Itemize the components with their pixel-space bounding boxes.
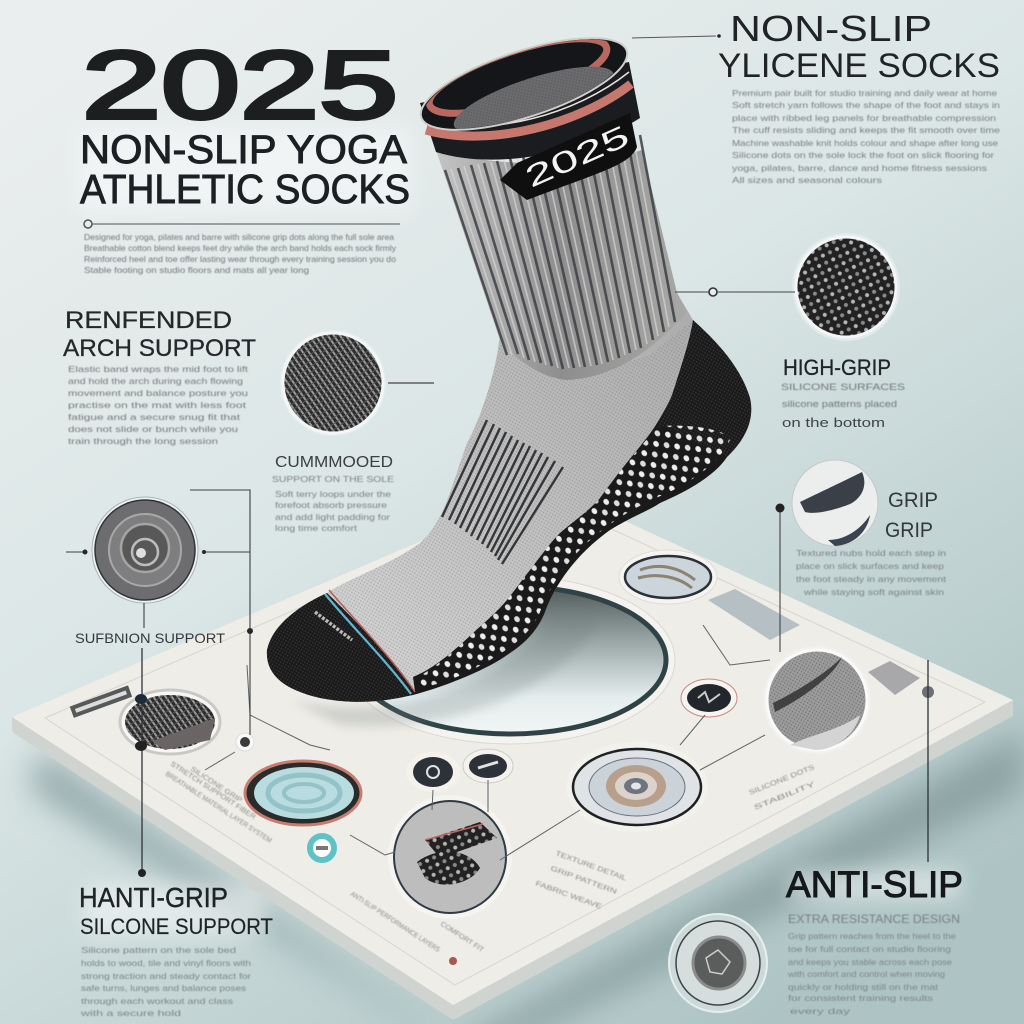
display board bbox=[12, 486, 1013, 1020]
sock toe seam stripes bbox=[325, 590, 415, 694]
connector: anti-grip line bbox=[135, 648, 147, 877]
arch body text: train through the long session bbox=[68, 436, 218, 446]
board fine print: ANTI-SLIP PERFORMANCE LAYERS bbox=[349, 891, 441, 954]
board fine print: STABILITY bbox=[753, 781, 817, 812]
board fine print: BREATHABLE MATERIAL LAYER SYSTEM bbox=[164, 771, 273, 845]
board fine print: SILICONE DOTS bbox=[748, 764, 816, 797]
board icon: eye bbox=[406, 752, 460, 792]
anti-slip body text: Grip pattern reaches from the heel to the bbox=[788, 931, 956, 941]
board fine print: STRETCH SUPPORT FIBER bbox=[169, 761, 257, 821]
anti-slip connector bbox=[927, 660, 929, 862]
anti-slip body text: with comfort and control when moving bbox=[787, 969, 945, 979]
callout: anti-grip silicone support bbox=[79, 882, 273, 1018]
top right body text: Soft stretch yarn follows the shape of the foot and stays in bbox=[732, 100, 1000, 110]
anti-grip body text: Silicone pattern on the sole bed bbox=[81, 945, 236, 955]
top right connector bbox=[632, 34, 721, 38]
anti-grip body text: strong traction and steady contact for bbox=[81, 971, 251, 981]
heading glows bbox=[80, 130, 960, 935]
intro body text: Reinforced heel and toe offer lasting wear through every training session you do bbox=[84, 254, 396, 264]
top right body text: The cuff resists sliding and keeps the fit smooth over time bbox=[732, 125, 1000, 135]
board marker dot bbox=[236, 733, 254, 751]
grip swatch circle bbox=[792, 460, 878, 546]
callout: anti-slip bbox=[786, 864, 963, 1016]
board fine print bbox=[164, 761, 817, 954]
anti-slip body text: toe for full contact on studio flooring bbox=[788, 944, 951, 954]
grip body text bbox=[796, 548, 947, 597]
callout: cushioned bbox=[272, 454, 394, 533]
anti-slip button swatch bbox=[669, 914, 767, 1012]
board icon: dark badge right bbox=[681, 679, 737, 717]
intro body text bbox=[84, 232, 397, 275]
cuff opening bbox=[420, 37, 628, 131]
grip heading 1: GRIP bbox=[888, 489, 938, 512]
board marker right bbox=[922, 686, 934, 698]
arch body text: fatigue and a secure snug fit that bbox=[68, 412, 241, 422]
title line 1: NON-SLIP YOGA bbox=[80, 128, 407, 172]
anti-slip body text: quickly or holding still on the mat bbox=[788, 982, 939, 992]
anti-slip subheading: EXTRA RESISTANCE DESIGN bbox=[788, 912, 960, 926]
board fine print: TEXTURE DETAIL bbox=[554, 850, 627, 883]
high-grip swatch circle bbox=[792, 233, 900, 341]
top right body text: Silicone dots on the sole lock the foot on slick flooring for bbox=[732, 150, 994, 160]
arch body text: practise on the mat with less foot bbox=[68, 400, 247, 410]
sock knit texture bbox=[327, 320, 693, 690]
board swatch: left woven bbox=[120, 690, 220, 754]
cuff front stripes bbox=[425, 72, 631, 136]
intro body text: Stable footing on studio floors and mats all year long bbox=[84, 265, 309, 275]
arch heading line 2: ARCH SUPPORT bbox=[63, 335, 256, 362]
anti-slip body text bbox=[787, 931, 956, 1016]
on the bottom label: on the bottom bbox=[782, 415, 885, 430]
arch swatch circle bbox=[280, 330, 386, 436]
anti-grip heading: HANTI-GRIP bbox=[79, 882, 228, 913]
board icon: teal ring bbox=[310, 836, 334, 860]
cushioned body text: SUPPORT ON THE SOLE bbox=[272, 474, 394, 484]
arch connector arrow bbox=[388, 382, 434, 384]
board swatch: knit fold bbox=[763, 646, 871, 754]
intro body text: Designed for yoga, pilates and barre with silicone grip dots along the full sole area bbox=[84, 232, 394, 242]
board annotation lines bbox=[205, 625, 770, 860]
callout: non-slip silicone socks bbox=[632, 8, 1000, 185]
sock body bbox=[267, 150, 751, 702]
grip body text: Textured nubs hold each step in bbox=[796, 548, 946, 558]
grip body text: while staying soft against skin bbox=[803, 587, 944, 597]
suspension support label: SUFBNION SUPPORT bbox=[75, 630, 225, 646]
board fine print: FABRIC WEAVE bbox=[534, 880, 603, 911]
board swatch: silicone pads bbox=[388, 795, 512, 919]
anti-slip body text: for consistent training results bbox=[788, 993, 933, 1003]
board swatch: concentric ripple bbox=[566, 742, 708, 832]
board swatch: lined top right bbox=[619, 550, 717, 604]
callout: reinforced arch support bbox=[63, 307, 256, 446]
top right body text bbox=[732, 88, 1000, 185]
sock ribbed leg bbox=[436, 135, 687, 380]
cushioned heading: CUMMMOOED bbox=[275, 454, 393, 471]
sock side stripes bbox=[442, 420, 563, 564]
anti-grip body text: through each workout and class bbox=[81, 996, 233, 1006]
board fine print: GRIP PATTERN bbox=[549, 865, 617, 896]
anti-slip body text: and keeps you stable across each pose bbox=[788, 957, 952, 967]
high-grip body text bbox=[781, 382, 905, 409]
callout: grip bbox=[796, 489, 947, 597]
sock shadow on recess bbox=[290, 610, 600, 726]
cushioned body text: Soft terry loops under the bbox=[275, 489, 391, 499]
board swatch: teal silicone bbox=[245, 761, 361, 825]
cushioned body text: and add light padding for bbox=[275, 512, 390, 522]
arch body text bbox=[68, 364, 249, 446]
board oval recess bbox=[354, 586, 666, 734]
arch body text: does not slide or bunch while you bbox=[68, 424, 238, 434]
anti-grip body text: safe turns, lunges and balance poses bbox=[81, 983, 246, 993]
top right body text: All sizes and seasonal colours bbox=[732, 175, 882, 185]
title year: 2025 bbox=[82, 32, 398, 139]
top right heading line 2: YLICENE SOCKS bbox=[718, 47, 1000, 85]
title bbox=[80, 32, 410, 212]
intro body text: Breathable cotton blend keeps feet dry while the arch band holds each sock firmly bbox=[84, 243, 397, 253]
board photo strip bbox=[708, 589, 800, 640]
board shadow bbox=[30, 730, 1024, 1024]
grip heading 2: GRIP bbox=[885, 519, 933, 542]
cushioned body text: forefoot absorb pressure bbox=[275, 500, 387, 510]
sock black knit texture bbox=[267, 320, 751, 702]
board surface bbox=[12, 486, 1013, 1005]
sock black heel, sole and toe bbox=[267, 320, 751, 702]
arch body text: Elastic band wraps the mid foot to lift bbox=[68, 364, 249, 374]
board inner border bbox=[45, 500, 985, 985]
anti-grip body text bbox=[80, 945, 251, 1018]
arch body text: movement and balance posture you bbox=[68, 388, 248, 398]
arch body text: and hold the arch during each flowing bbox=[68, 376, 243, 386]
intro rule bbox=[84, 220, 400, 228]
high-grip connector bbox=[675, 288, 795, 296]
cushioned body text bbox=[272, 474, 394, 533]
suspension swatch coin bbox=[92, 497, 198, 603]
anti-slip heading: ANTI-SLIP bbox=[786, 864, 963, 905]
top right body text: yoga, pilates, barre, dance and home fitness sessions bbox=[732, 163, 987, 173]
board thickness bbox=[12, 700, 1013, 1020]
board label strip left bbox=[70, 685, 132, 718]
sock bbox=[267, 19, 751, 702]
arch heading line 1: RENFENDED bbox=[65, 307, 232, 334]
top right body text: Premium pair built for studio training and daily wear at home bbox=[732, 88, 997, 98]
anti-grip body text: with a secure hold bbox=[80, 1008, 181, 1018]
top right body text: Machine washable knit holds colour and shape after long use bbox=[732, 138, 998, 148]
board recess ring bbox=[345, 576, 675, 744]
cuff outer band bbox=[420, 62, 640, 160]
silicone support heading: SILCONE SUPPORT bbox=[80, 914, 273, 939]
anti-grip body text: holds to wood, tile and vinyl floors with bbox=[81, 958, 251, 968]
board icon: badge bbox=[463, 749, 513, 783]
top right heading line 1: NON-SLIP bbox=[730, 8, 932, 49]
suspension connector lines bbox=[66, 490, 250, 735]
high-grip body text: silicone patterns placed bbox=[782, 399, 897, 409]
sock grip dots bbox=[416, 426, 731, 688]
anti-slip body text: every day bbox=[790, 1006, 851, 1016]
board photo strip right bbox=[868, 661, 920, 695]
callout: high-grip bbox=[781, 355, 905, 430]
board marker red bbox=[449, 957, 457, 965]
grip body text: the foot steady in any movement bbox=[796, 574, 947, 584]
high-grip heading: HIGH-GRIP bbox=[783, 355, 891, 380]
cuff 2025 tag bbox=[500, 113, 637, 200]
cuff 2025 tag: 2025 bbox=[520, 120, 634, 194]
board fine print: SILICONE GRIP bbox=[189, 766, 243, 805]
title line 2: ATHLETIC SOCKS bbox=[80, 166, 410, 212]
suspension connector markers bbox=[82, 550, 253, 634]
top right body text: place with ribbed leg panels for breathable compression bbox=[732, 113, 996, 123]
grip body text: place on slick surfaces and keep bbox=[796, 561, 944, 571]
sock toe label bbox=[315, 612, 352, 640]
high-grip body text: SILICONE SURFACES bbox=[781, 382, 905, 392]
cushioned body text: long time comfort bbox=[275, 523, 358, 533]
board fine print: COMFORT FIT bbox=[439, 921, 485, 954]
grip connector bbox=[776, 504, 784, 652]
